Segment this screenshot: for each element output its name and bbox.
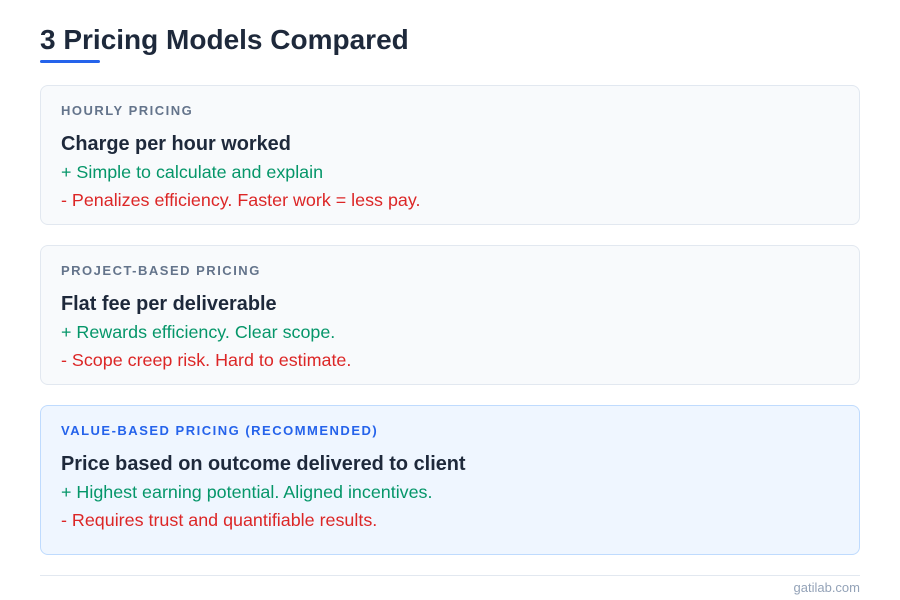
- footer source: gatilab.com: [794, 580, 860, 595]
- label: value: VALUE-BASED PRICING (RECOMMENDED): [61, 423, 378, 438]
- panel: project-based pricing: [40, 245, 860, 385]
- label: project: PROJECT-BASED PRICING: [61, 263, 261, 278]
- label: hourly: HOURLY PRICING: [61, 103, 193, 118]
- pro: project: + Rewards efficiency. Clear scope.: [61, 322, 335, 342]
- pro: value: + Highest earning potential. Aligned incentives.: [61, 482, 432, 502]
- title underline: [40, 60, 100, 63]
- panel: value-based pricing: [40, 405, 860, 555]
- heading: project: Flat fee per deliverable: [61, 293, 277, 315]
- panel: hourly pricing: [40, 85, 860, 225]
- title: 3 Pricing Models Compared: [40, 24, 409, 55]
- pro: hourly: + Simple to calculate and explain: [61, 162, 323, 182]
- heading: hourly: Charge per hour worked: [61, 133, 291, 155]
- con: project: - Scope creep risk. Hard to estimate.: [61, 350, 351, 370]
- con: hourly: - Penalizes efficiency. Faster work = less pay.: [61, 190, 420, 210]
- con: value: - Requires trust and quantifiable results.: [61, 510, 377, 530]
- heading: value: Price based on outcome delivered to client: [61, 453, 466, 475]
